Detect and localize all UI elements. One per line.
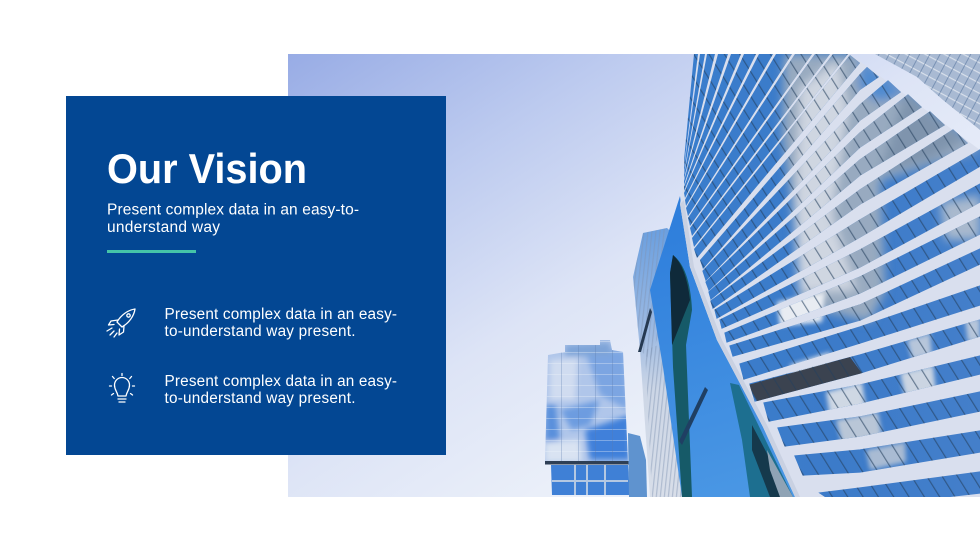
small building behind [628, 433, 647, 497]
corner face at top right [875, 54, 980, 130]
icon: light bulb [110, 374, 134, 402]
main curved tower [680, 54, 980, 497]
panel background [66, 96, 446, 455]
tall middle tower [633, 228, 684, 497]
distant left tower [545, 340, 629, 495]
icon: rocket [107, 309, 135, 337]
sky background [288, 54, 980, 497]
text: bulb item [164, 373, 397, 407]
subtitle: Present complex data in an easy-to- [107, 202, 359, 218]
subtitle [107, 202, 359, 236]
window strips [684, 54, 980, 497]
text: rocket item [164, 306, 397, 340]
text: bulb item: Present complex data in an easy- [164, 373, 397, 390]
panel: our vision [66, 96, 446, 455]
subtitle: understand way [107, 219, 220, 236]
text: rocket item: Present complex data in an easy- [164, 306, 397, 323]
title: Our Vision [107, 145, 307, 192]
photo: city skyscrapers [288, 54, 980, 497]
text: bulb item: to-understand way present. [164, 390, 356, 407]
cloud reflections [680, 54, 980, 497]
text: rocket item: to-understand way present. [164, 323, 356, 340]
blue curved facade [650, 196, 800, 497]
dark window run [748, 357, 864, 402]
accent line [107, 250, 196, 253]
